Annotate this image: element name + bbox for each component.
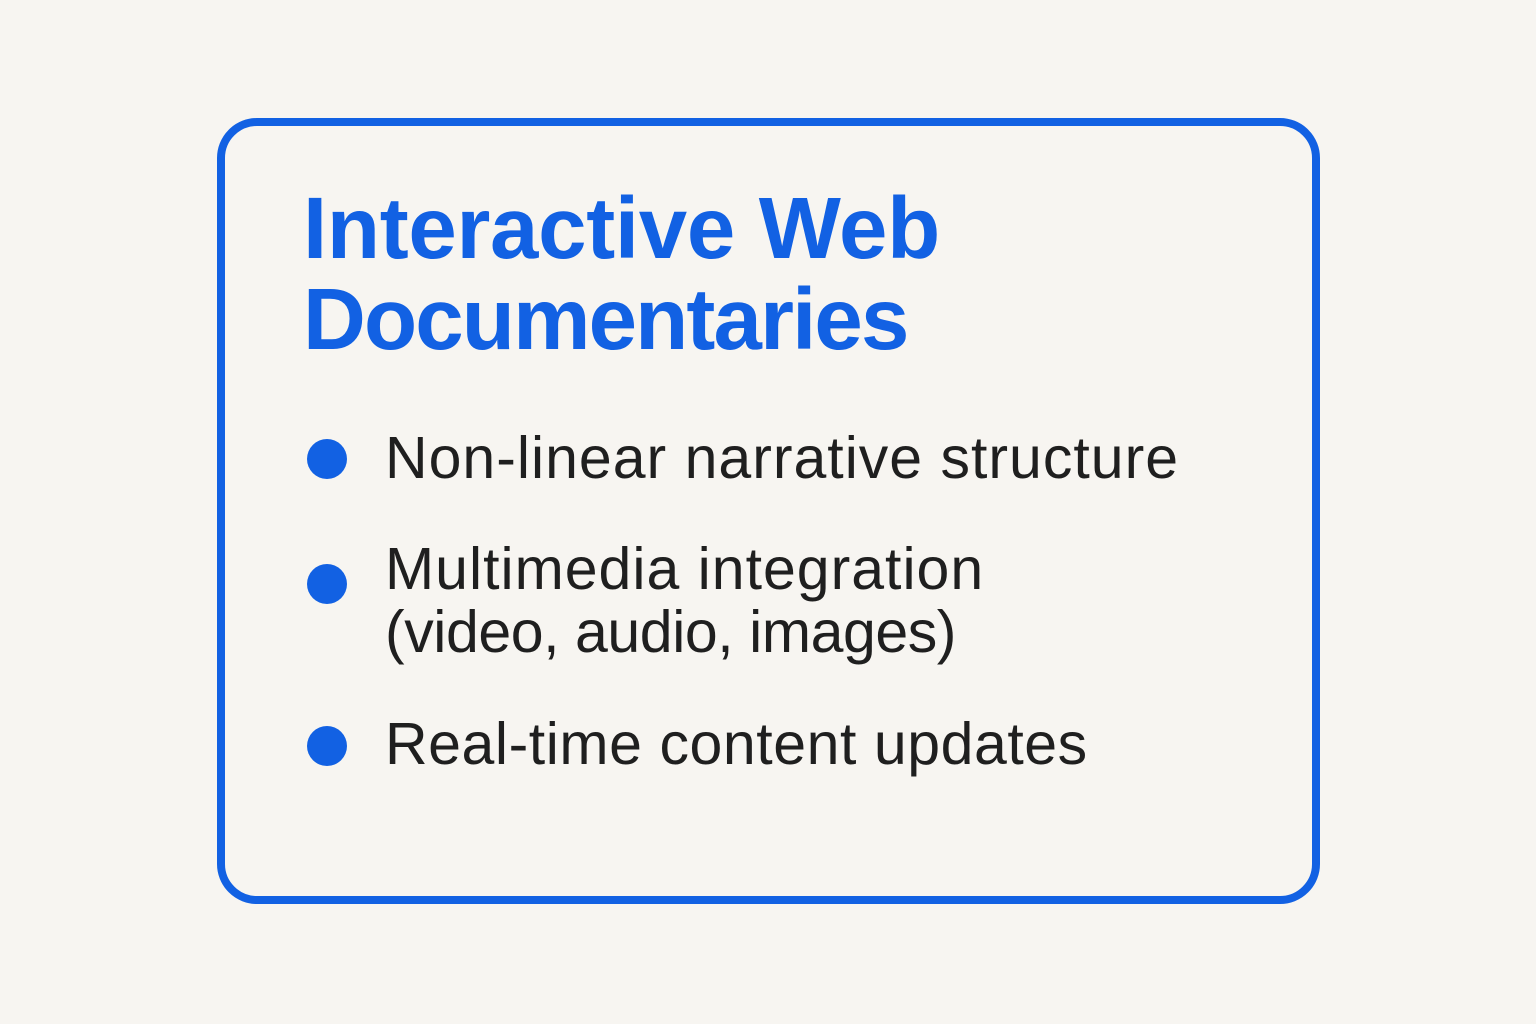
text: multimedia integration [385,536,984,665]
title: Interactive Web [303,180,940,277]
text: real-time updates: Real-time content updates [385,711,1088,777]
panel: interactive web documentaries card [217,118,1320,904]
title: Documentaries [303,271,908,368]
bullet icon 1 [307,439,347,479]
text: multimedia integration: (video, audio, images) [385,599,956,665]
bullet icon 2 [307,564,347,604]
bullet icon 3 [307,726,347,766]
title [303,180,940,368]
text: non-linear narrative: Non-linear narrative structure [385,425,1179,491]
text: multimedia integration: Multimedia integration [385,536,984,602]
